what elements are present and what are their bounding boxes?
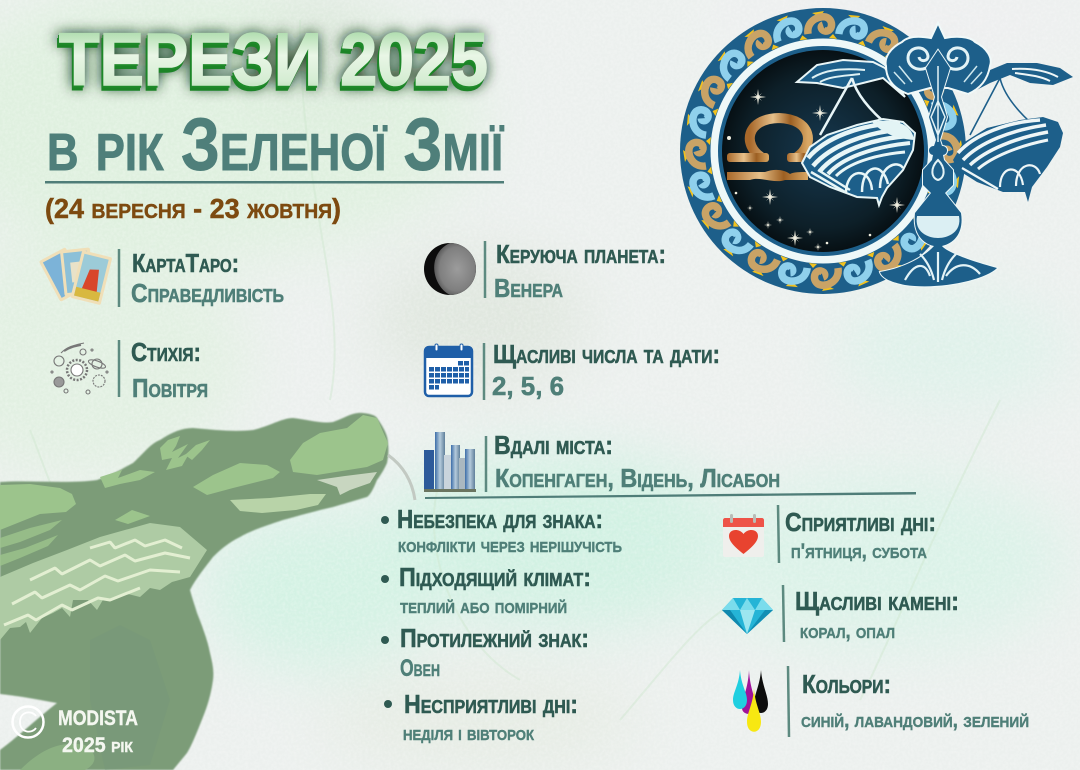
title: ТЕРЕЗИ 2025 xyxy=(58,19,487,102)
item: element: Повітря xyxy=(132,373,208,403)
separator xyxy=(485,436,487,492)
opposite sign: Овен xyxy=(400,655,440,682)
item: cities: Вдалі міста: xyxy=(494,430,613,460)
icon: cosmos doodle xyxy=(51,343,108,394)
item: colors xyxy=(733,666,1029,737)
separator xyxy=(483,343,485,400)
snake snout highlight xyxy=(290,415,388,475)
opposite sign xyxy=(381,623,589,682)
unfavorable days xyxy=(384,689,578,745)
item: tarot card xyxy=(39,247,284,308)
icon: tarot cards xyxy=(39,247,112,305)
snake teeth xyxy=(317,472,377,495)
libra glyph xyxy=(727,118,811,181)
item: lucky numbers: Щасливі числа та дати: xyxy=(493,339,720,369)
separator xyxy=(778,505,779,563)
title: ТЕРЕЗИ 2025 xyxy=(57,23,486,106)
item: tarot card: Справедливість xyxy=(131,278,284,308)
icon: copyright xyxy=(12,706,44,738)
danger: конфлікти через нерішучість xyxy=(398,534,622,557)
item: favorable days: п'ятниця, субота xyxy=(791,540,927,563)
snake tongue xyxy=(388,455,415,500)
snake dark shadow xyxy=(90,625,170,770)
section divider xyxy=(425,492,916,499)
icon: calendar xyxy=(425,344,472,396)
zodiac emblem xyxy=(680,8,1073,294)
emblem ring xyxy=(680,8,966,294)
climate: теплий або помірний xyxy=(400,595,567,618)
left pan xyxy=(802,119,915,205)
item: favorable days xyxy=(723,505,936,563)
item: lucky numbers xyxy=(425,339,720,401)
snake belly xyxy=(0,523,207,640)
separator xyxy=(484,241,486,298)
list: sign facts xyxy=(381,504,622,745)
scales xyxy=(797,23,1073,286)
item: tarot card: КартаТаро: xyxy=(132,248,239,278)
icon: planet xyxy=(424,243,476,295)
title: ТЕРЕЗИ 2025 xyxy=(59,18,488,101)
snake lower coil highlight xyxy=(20,744,94,770)
item: element: Стихія: xyxy=(131,337,201,367)
climate xyxy=(381,562,591,618)
item: favorable days: Сприятливі дні: xyxy=(785,507,936,537)
icon: ink drops xyxy=(733,670,768,732)
date range: (24 вересня - 23 жовтня) xyxy=(45,193,341,224)
item: lucky stones: Щасливі камені: xyxy=(795,586,959,616)
title: ТЕРЕЗИ 2025 xyxy=(58,20,487,103)
copyright: 2025 рік xyxy=(62,734,134,757)
opposite sign: Протилежний знак: xyxy=(400,623,589,653)
snake illustration xyxy=(0,413,415,770)
scale column xyxy=(880,50,997,286)
item: cities: Копенгаген, Відень, Лісабон xyxy=(495,463,780,493)
left beam ornament xyxy=(797,60,905,97)
icon: city skyline xyxy=(424,432,476,492)
icon: diamond xyxy=(722,598,773,634)
item: lucky numbers: 2, 5, 6 xyxy=(492,371,564,401)
unfavorable days: Несприятливі дні: xyxy=(404,689,578,719)
snake head highlight xyxy=(193,463,280,495)
item: lucky stones xyxy=(722,585,959,643)
separator xyxy=(788,666,789,737)
icon: heart calendar xyxy=(723,514,764,557)
climate: Підходящий клімат: xyxy=(399,562,591,592)
item: colors: Кольори: xyxy=(802,669,891,699)
item: cities xyxy=(424,430,780,493)
right pan chains xyxy=(970,78,1048,135)
subtitle underline xyxy=(45,181,504,184)
item: ruling planet: Венера xyxy=(494,273,563,303)
item: ruling planet: Керуюча планета: xyxy=(496,239,666,269)
item: colors: синій, лавандовий, зелений xyxy=(801,709,1029,732)
item: ruling planet xyxy=(424,239,666,303)
subtitle: в рік Зеленої Змії xyxy=(47,103,504,186)
emblem stars xyxy=(727,89,905,251)
right pan xyxy=(953,117,1063,202)
danger xyxy=(381,504,622,557)
danger: Небезпека для знака: xyxy=(397,504,603,534)
copyright: MODISTA xyxy=(58,707,138,730)
separator xyxy=(118,249,120,307)
copyright xyxy=(12,706,138,757)
right beam ornament xyxy=(967,63,1073,95)
snake jaw xyxy=(230,494,326,513)
item: element xyxy=(51,337,208,403)
separator xyxy=(118,340,120,397)
left pan chains xyxy=(820,78,900,135)
unfavorable days: неділя і вівторок xyxy=(403,722,535,745)
snake neck scales xyxy=(0,436,210,566)
item: lucky stones: корал, опал xyxy=(800,620,895,643)
scale head xyxy=(886,23,991,94)
separator xyxy=(783,585,784,642)
